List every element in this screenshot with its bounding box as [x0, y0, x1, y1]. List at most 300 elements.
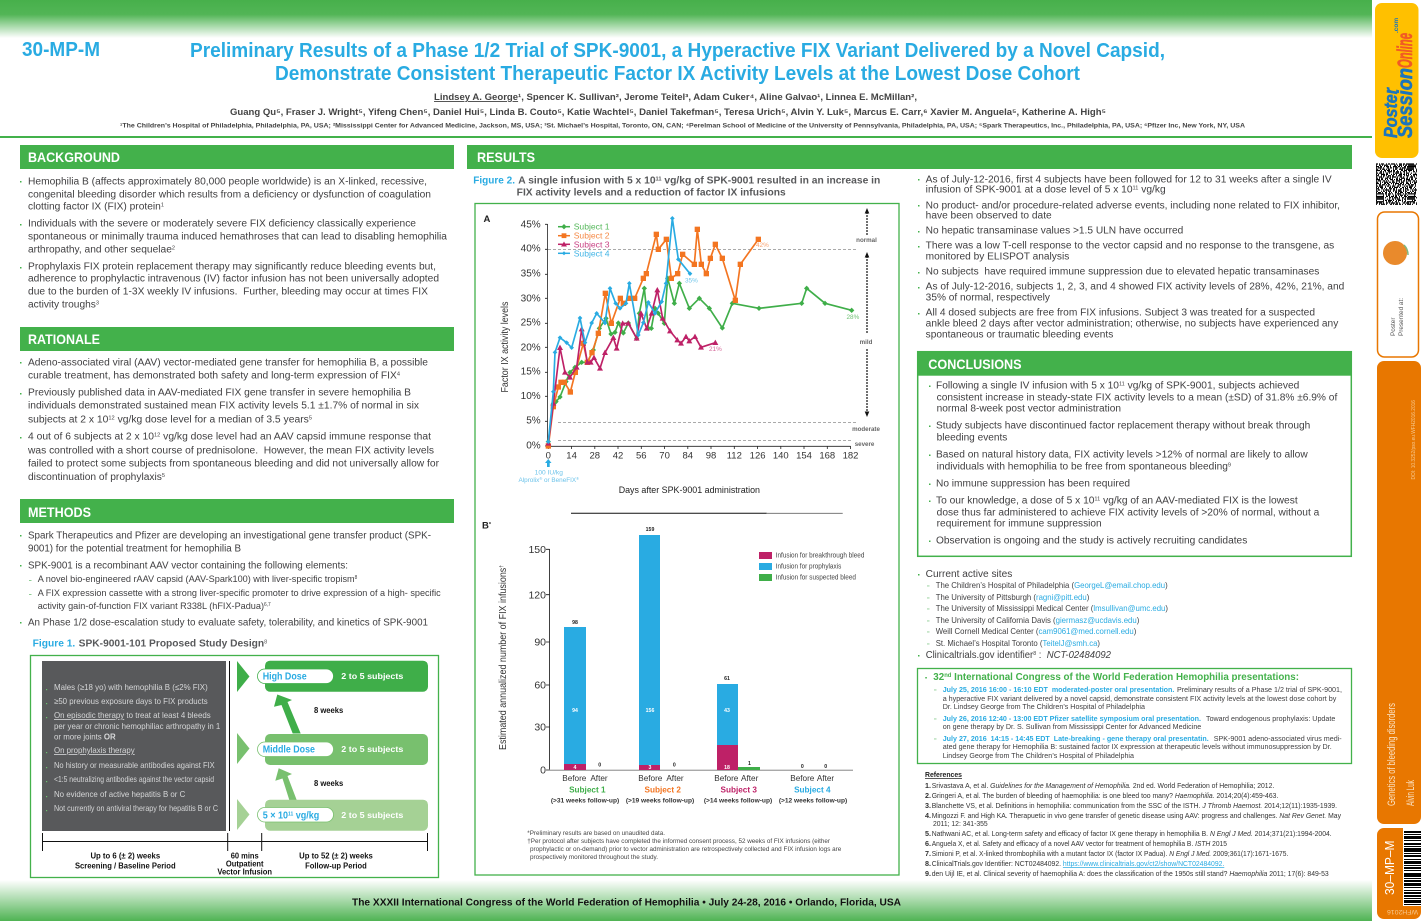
text block: presentation list: SPK-9001 adeno-associated virus medi-	[1214, 734, 1342, 743]
text block: rationale bullets: was controlled with a short course of prednisolone. However, the mean FIX activity levels	[27, 446, 434, 456]
reference list	[925, 781, 1341, 878]
sidebar: orange topic panel: Genetics of bleeding disorders	[1386, 703, 1398, 806]
reference list: 3.	[925, 801, 931, 810]
dose bar: middle dose: Middle Dose	[263, 744, 315, 756]
reference list: Mingozzi F. and High KA. Therapuetic in vivo gene transfer of genetic disease using AAV: progress and challenges. Nat Rev Genet. May	[932, 811, 1341, 820]
text block: conclusions bullets: 11	[1094, 496, 1100, 502]
text block: results bullets: No subjects have required immune suppression due to elevated hepatic transaminases	[926, 266, 1319, 278]
text block: rationale bullets	[20, 358, 440, 483]
text block: background bullets: activity troughs	[28, 300, 95, 310]
subject 1 bars	[564, 620, 601, 771]
text block: conclusions bullets: Observation is ongoing and the study is actively recruiting candidates	[936, 536, 1247, 546]
panel label B: *	[489, 522, 492, 528]
y axis label: Factor IX activity levels	[500, 302, 511, 392]
subject 3 bars: 1	[748, 761, 751, 767]
figure 2 caption: FIX activity levels and a reduction of factor IX infusions	[517, 188, 786, 199]
legend: Infusion for prophylaxis	[776, 562, 842, 570]
text block: results bullets: ankle bleed 2 days after vector administration; otherwise, no subjects have experienced any	[926, 318, 1338, 330]
text block: background bullets: Hemophilia B (affects approximately 80,000 people worldwide) is an X-linked, recessive,	[28, 176, 427, 188]
y axis: 30%	[521, 294, 541, 304]
x axis: 154	[796, 450, 812, 462]
timeline: Up to 52 (± 2) weeks	[299, 852, 373, 860]
text block: current active sites: 8	[1033, 651, 1036, 657]
end value labels: 21%	[709, 346, 722, 353]
arrow: high dose escalation	[274, 694, 301, 734]
footer gradient band	[0, 880, 1372, 921]
figure 2 caption: vg/kg of SPK-9001 resulted in an increase in	[662, 176, 880, 187]
text block: presentation list: on gene therapy by Dr. S. Sullivan from Mississippi Center for Advanced Medicine	[943, 722, 1201, 731]
subject 3 bars	[717, 676, 760, 771]
dose bar: low dose: 11	[288, 812, 293, 818]
y axis: 60	[534, 680, 546, 692]
subject 1 bars: 94	[572, 708, 578, 714]
text block: rationale bullets: 12	[108, 416, 115, 422]
x axis: 84	[683, 450, 693, 462]
text block: presentation list: a hyperactive FIX variant delivered by a novel capsid, demonstrate consistent FIX activity levels at the lowest dose cohort by	[943, 694, 1336, 703]
authors: ¹The Children’s Hospital of Philadelphia, Philadelphia, PA, USA; ²Mississippi Center for Advanced Medicine, Jackson, MS, USA; ³St. Michael’s Hospital, Toronto, ON, CAN; ⁴Perelman School of Medicine of the University of Pennsylvania, Philadelphia, PA, USA; ⁵Spark Therapeutics, Inc., Philadelphia, PA, USA; ⁶Pfizer Inc, New York, NY, USA	[120, 122, 1245, 130]
legend: Subject 1	[574, 222, 610, 232]
subject 3 bars: 18	[724, 765, 730, 771]
dose bar: low dose	[237, 799, 428, 831]
text block: current active sites: Weill Cornell Medical Center (cam9061@med.cornell.edu)	[936, 626, 1136, 636]
legend: Infusion for suspected bleed	[776, 572, 856, 582]
before after labels: Before	[562, 774, 587, 783]
legend: Subject 2	[574, 231, 610, 241]
x axis	[546, 446, 858, 462]
y axis: 45%	[521, 220, 541, 230]
authors	[120, 92, 1245, 130]
follow-up labels: (>31 weeks follow-up)	[551, 798, 619, 804]
text block: methods bullets: A FIX expression cassette with a strong liver-specific promoter to drive expression of a high- specific	[38, 588, 441, 599]
text block: rationale bullets: 5	[162, 473, 165, 479]
subject 4 values: 0	[801, 764, 804, 770]
inclusion criteria panel: Not currently on antiviral therapy for hepatitis B or C	[54, 804, 218, 813]
presented at text: Poster	[1390, 317, 1397, 336]
text block: current active sites: The Children’s Hospital of Philadelphia (GeorgeL@email.chop.edu)	[936, 580, 1168, 590]
text block: results bullets: 35% of normal, respectively	[926, 292, 1050, 304]
heading: rationale	[20, 327, 454, 351]
text block: conclusions bullets: dose thus far administered to achieve FIX activity levels of >20% of normal, without a	[937, 508, 1320, 518]
text block: conclusions bullets: 9	[1228, 462, 1231, 468]
authors: Guang Qu⁵, Fraser J. Wright⁵, Yifeng Chen⁵, Daniel Hui⁵, Linda B. Couto⁵, Katie Wachtel⁵, Daniel Takefman⁵, Teresa Urich⁵, Alvin Y. Luk⁵, Marcus E. Carr,⁶ Xavier M. Anguela⁵, Katherine A. High⁵	[230, 107, 1106, 117]
figure 2 caption	[473, 176, 880, 199]
text block: results bullets: have been observed to date	[926, 210, 1052, 222]
text block: conclusions bullets: To our knowledge, a dose of 5 x 10	[936, 496, 1091, 506]
text block: results bullets: No product- and/or procedure-related adverse events, including none related to FIX inhibitor,	[926, 200, 1340, 212]
reference list: Srivastava A, et al. Guidelines for the Management of Hemophilia. 2nd ed. World Federation of Hemophilia; 2012.	[932, 781, 1274, 790]
inclusion criteria panel: No history or measurable antibodies against FIX	[54, 761, 215, 770]
text block: methods bullets	[20, 530, 441, 628]
heading: rationale: RATIONALE	[28, 331, 100, 347]
reference list: 9.	[925, 869, 931, 878]
footnotes: *Preliminary results are based on unaudited data.	[527, 830, 665, 837]
text block: results bullets: All 4 dosed subjects are free from FIX infusions. Subject 3 was treated for a suspected	[926, 308, 1315, 318]
sidebar: orange topic panel: Alvin Luk	[1405, 780, 1417, 806]
before after labels: After	[817, 774, 834, 783]
x axis: 168	[819, 450, 835, 462]
timeline: Up to 6 (± 2) weeks	[90, 852, 161, 860]
top gradient band	[0, 0, 1372, 38]
inclusion criteria panel: per year or chronic hemophiliac arthropathy in 1	[54, 722, 221, 731]
text block: rationale bullets: 4	[397, 372, 400, 378]
panel: conclusions	[917, 351, 1352, 556]
reference list: 4.	[925, 811, 931, 820]
text block: results bullets: spontaneous or traumatic bleeding events	[926, 330, 1113, 340]
series: subject 3	[548, 290, 715, 443]
sidebar: QR code	[1376, 163, 1417, 205]
legend: Infusion for breakthrough bleed	[776, 550, 864, 560]
sidebar: poster session online logo: Session	[1394, 68, 1417, 138]
inclusion criteria panel: or more joints OR	[54, 732, 116, 742]
text block: current active sites: The University of California Davis (giermasz@ucdavis.edu)	[936, 615, 1139, 625]
timeline: Outpatient	[226, 860, 264, 868]
text block: methods bullets: 8	[355, 575, 358, 581]
follow-up labels	[551, 798, 847, 804]
sidebar: poster session online logo: .com	[1393, 18, 1400, 33]
text block: current active sites: The University of Pittsburgh (ragni@pitt.edu)	[936, 592, 1089, 602]
text block: conclusions bullets: 11	[1119, 382, 1125, 388]
text block: results bullets: As of July-12-2016, first 4 subjects have been followed for 12 to 31 weeks after a single IV	[926, 174, 1332, 186]
reference list: Nathwani AC, et al. Long-term safety and efficacy of factor IX gene therapy in hemophilia B. N Engl J Med. 2014;371(21):1994-2004.	[932, 829, 1332, 838]
text block: presentation list: July 26, 2016 12:40 - 13:00 EDT Pfizer satellite symposium oral presentation.	[943, 714, 1201, 723]
heading: conclusions	[917, 351, 1352, 376]
severity labels: moderate	[852, 426, 880, 433]
y axis: 20%	[521, 342, 541, 354]
reference list: Simioni P, et al. X-linked thrombophilia with a mutant factor IX (factor IX Padua). N Engl J Med. 2009;361(17):1671-1675.	[932, 849, 1288, 858]
inclusion criteria panel	[42, 661, 226, 831]
timeline: Follow-up Period	[305, 862, 367, 870]
text block: conclusions bullets	[929, 380, 1338, 546]
text block: background bullets: 2	[172, 246, 175, 252]
y axis: 0%	[526, 440, 541, 452]
text block: current active sites: NCT-02484092	[1047, 650, 1111, 661]
figure 2 caption: Figure 2.	[473, 176, 515, 187]
icon: conference logo	[1383, 241, 1408, 265]
barcode	[1404, 831, 1421, 905]
text block: presentation list: July 27, 2016 14:15 - 14:45 EDT Late-breaking - gene therapy oral presentatin.	[943, 734, 1209, 743]
panel label A: A	[484, 214, 490, 225]
severity labels: severe	[855, 441, 875, 448]
text block: results bullets: infusion of SPK-9001 at a dose level of 5 x 10	[926, 184, 1128, 196]
legend: Subject 4	[574, 248, 610, 258]
x axis: 182	[843, 450, 858, 462]
text block: rationale bullets: discontinuation of prophylaxis	[28, 472, 159, 483]
figure 1 caption: 8	[264, 640, 267, 646]
subject 1 bars: 0	[598, 762, 601, 768]
legend	[759, 550, 864, 582]
footnotes: †Per protocol after subjects have completed the informed consent process, 52 weeks of FIX infusions (either	[527, 838, 831, 845]
authors: Lindsey A. George ¹, Spencer K. Sullivan², Jerome Teitel³, Adam Cuker⁴, Aline Galvao¹, Linnea E. McMillan²,	[434, 92, 917, 102]
subject 1 bars: 98	[572, 620, 578, 626]
x axis: 112	[727, 450, 742, 462]
subject 2 bars	[639, 527, 676, 771]
text block: conclusions bullets: Study subjects have discontinued factor replacement therapy without break through	[936, 420, 1310, 432]
text block: presentation list: Preliminary results of a Phase 1/2 trial of SPK-9001,	[1177, 685, 1342, 694]
reference list: ClinicalTrials.gov Identifier: NCT02484092. https://www.clinicaltrials.gov/ct2/show/NCT02484092.	[932, 859, 1224, 868]
text block: conclusions bullets: consistent increase in steady-state FIX activity levels to a mean (±SD) of 31.8% ±6.9% of	[937, 392, 1338, 404]
sidebar: presented at panel	[1378, 212, 1418, 357]
text block: methods bullets: Spark Therapeutics and Pfizer are developing an investigational gene transfer product (SPK-	[28, 530, 431, 542]
text block: methods bullets: An Phase 1/2 dose-escalation study to evaluate safety, tolerability, and kinetics of SPK-9001	[28, 618, 428, 628]
text block: current active sites	[918, 569, 1168, 661]
heading: congress presentations: International Congress of the World Federation Hemophilia presentations:	[951, 672, 1299, 683]
data series	[548, 218, 852, 446]
panel label B: B	[482, 520, 489, 532]
y axis: 5%	[526, 416, 541, 426]
series: subject 2	[548, 229, 758, 446]
figure 1 caption: SPK-9001-101 Proposed Study Design	[79, 638, 260, 650]
before after labels: After	[741, 774, 759, 783]
sidebar: poster id and barcode	[1377, 828, 1421, 919]
y axis: 25%	[521, 318, 541, 328]
text block: presentation list: Dr. Lindsey George from The Children’s Hospital of Philadelphia	[943, 702, 1146, 711]
label: 8 weeks lower: 8 weeks	[314, 779, 344, 788]
label: 8 weeks upper: 8 weeks	[314, 706, 344, 715]
text block: background bullets: 1	[161, 202, 164, 208]
panel: rationale	[20, 327, 454, 483]
text block: rationale bullets: vg/kg dose level had an AAV capsid immune response that	[160, 432, 431, 442]
legend: Subject 3	[574, 239, 610, 249]
y axis: 35%	[521, 268, 541, 280]
heading: methods	[20, 499, 454, 523]
text block: presentation list: Toward endogenous prophylaxis: Update	[1206, 714, 1335, 723]
panel: WFH congress presentations	[918, 668, 1352, 764]
y axis: 120	[528, 590, 546, 602]
subject labels: Subject 2	[644, 786, 681, 794]
text block: current active sites: The University of Mississippi Medical Center (lmsullivan@umc.edu)	[936, 603, 1168, 613]
text block: rationale bullets: Adeno-associated viral (AAV) vector-mediated gene transfer for hemophilia B, a possible	[28, 358, 428, 368]
x axis: 126	[750, 450, 766, 462]
title: Demonstrate Consistent Therapeutic Factor IX Activity Levels at the Lowest Dose Cohort	[275, 62, 1080, 85]
header rule	[0, 136, 1372, 138]
presented at text	[1390, 298, 1405, 336]
reference list: 2.	[925, 791, 931, 800]
references	[925, 770, 1341, 878]
before after labels: After	[590, 774, 608, 783]
subject 3 bars: 61	[724, 676, 730, 682]
text block: current active sites: :	[1036, 650, 1047, 661]
timeline: Vector Infusion	[217, 868, 272, 876]
text block: results bullets: There was a low T-cell response to the vector capsid and no response to the transgene, as	[926, 240, 1334, 252]
reference list: 2011; 12: 341-355	[933, 819, 988, 828]
x axis: 0	[546, 450, 551, 462]
figure 2 frame	[475, 204, 899, 875]
subject 4 values	[801, 764, 827, 770]
y axis	[528, 544, 550, 776]
before after labels	[562, 774, 834, 783]
follow-up labels: (>14 weeks follow-up)	[704, 798, 772, 804]
text block: rationale bullets: 12	[154, 432, 160, 438]
before after labels: Before	[790, 774, 815, 783]
y axis: 0	[540, 764, 546, 776]
text block: background bullets: clotting factor IX (FIX) protein	[28, 202, 158, 212]
inclusion criteria panel: On episodic therapy to treat at least 4 bleeds	[54, 711, 211, 720]
y axis: 90	[534, 636, 546, 648]
text block: conclusions bullets: bleeding events	[937, 432, 1007, 444]
text block: methods bullets: activity gain-of-function FIX variant R338L (hFIX-Padua)	[38, 601, 273, 612]
text block: background bullets: 3	[96, 300, 99, 306]
text block: current active sites: Current active sites	[926, 569, 1012, 580]
subject 4 values: 0	[824, 764, 827, 770]
text block: current active sites: Clinicaltrials.gov identifier	[926, 650, 1039, 661]
infusion annotation: or BeneFIX	[542, 477, 577, 484]
infusion annotation: 100 IU/kg	[535, 470, 563, 476]
dose bar: high dose: High Dose	[263, 672, 307, 682]
text block: background bullets: adherence to prophylactic intravenous (IV) factor infusion has not been universally adopted	[28, 274, 439, 284]
text block: conclusions bullets: vg/kg of an AAV-mediated FIX is the lowest	[1100, 496, 1298, 506]
text block: rationale bullets: 5	[309, 416, 312, 422]
subject labels: Subject 3	[720, 786, 757, 794]
x axis: 70	[659, 450, 670, 462]
follow-up labels: (>12 weeks follow-up)	[779, 798, 847, 804]
footer text: The XXXII International Congress of the World Federation of Hemophilia • July 24-28, 2016 • Orlando, Florida, USA	[352, 898, 901, 908]
text block: conclusions bullets: normal 8-week post vector administration	[937, 404, 1121, 414]
heading: background: BACKGROUND	[28, 149, 120, 165]
dose bar: low dose: 5 × 10	[263, 810, 291, 822]
subject labels: Subject 1	[569, 786, 606, 794]
before after labels: Before	[714, 774, 739, 783]
figure 1: study design	[30, 656, 438, 878]
dose bar: high dose	[237, 661, 428, 692]
end value labels	[685, 242, 860, 353]
presented at text: Presented at:	[1398, 298, 1405, 336]
reference list: den Uijl IE, et al. Clinical severity of haemophilia A: does the classification of the 1950s still stand? Haemophilia 2011; 17(6): 849-53	[932, 869, 1329, 878]
dose bar: middle dose	[237, 733, 428, 765]
arrow: middle dose escalation	[275, 768, 297, 800]
arrowheads	[865, 208, 869, 417]
x axis title: Days after SPK-9001 administration	[619, 485, 760, 496]
heading: background	[20, 145, 454, 169]
text block: background bullets: due to the burden of 1-3X weekly IV infusions. Further, bleeding may occur at times FIX	[28, 286, 428, 298]
text block: rationale bullets: vg/kg dose level for a median of 3.5 years	[115, 414, 309, 426]
y axis: 150	[528, 544, 546, 556]
infusion annotation: ®	[576, 476, 579, 481]
subject labels	[569, 786, 831, 794]
severity labels: normal	[856, 237, 877, 244]
footnotes: prophylactic or on-demand) prior to vector administration are retrospectively collected and FIX infusion logs are	[530, 846, 842, 853]
text block: conclusions bullets: individuals with hemophilia to be free from spontaneous bleeding	[937, 462, 1224, 472]
infusion annotation	[518, 459, 579, 484]
panel: methods	[20, 499, 454, 878]
references heading: References	[925, 770, 962, 779]
text block: presentation list	[934, 685, 1342, 760]
legend	[558, 222, 610, 258]
sidebar: poster session online logo: Poster	[1381, 87, 1401, 138]
figure 1 caption: Figure 1.	[33, 638, 76, 650]
text block: results bullets: monitored by ELISPOT analysis	[926, 252, 1069, 262]
x axis: 42	[613, 450, 623, 462]
severity arrows	[866, 212, 868, 412]
y axis: 10%	[521, 391, 541, 402]
text block: background bullets: arthropathy, and other sequelae	[28, 244, 169, 256]
text block: rationale bullets: individuals demonstrated sustained mean FIX activity levels 5.1 ±1.7% of normal in six	[28, 400, 419, 412]
x axis: 56	[636, 450, 647, 462]
subject 2 bars: 3	[649, 765, 652, 771]
text block: methods bullets: SPK-9001 is a recombinant AAV vector containing the following elements:	[28, 560, 348, 572]
subject 2 bars: 0	[673, 762, 676, 768]
text block: conclusions bullets: vg/kg of SPK-9001, subjects achieved	[1125, 380, 1299, 392]
text block: background bullets: Individuals with the severe or moderately severe FIX deficiency classically experience	[28, 218, 416, 230]
baseline	[549, 770, 853, 771]
text block: presentation list: July 25, 2016 16:00 - 16:10 EDT moderated-poster oral presentation.	[943, 685, 1174, 694]
text block: results bullets	[918, 174, 1344, 340]
panel: background	[20, 145, 454, 310]
dose bar: low dose: 2 to 5 subjects	[341, 810, 404, 820]
infusion annotation: ®	[539, 476, 542, 481]
sidebar: poster session online logo	[1375, 3, 1418, 158]
heading: results: RESULTS	[477, 149, 535, 165]
sidebar: orange topic panel	[1377, 361, 1421, 824]
inclusion criteria panel: No evidence of active hepatitis B or C	[54, 790, 185, 799]
y axis: 30	[534, 722, 546, 734]
text block: conclusions bullets: Following a single IV infusion with 5 x 10	[936, 380, 1116, 392]
text block: rationale bullets: curable treatment, has demonstrated both safety and long-term expression of FIX	[28, 370, 388, 382]
reference list: 5.	[925, 829, 931, 838]
dose bar: middle dose: 2 to 5 subjects	[341, 744, 404, 754]
text block: background bullets: Prophylaxis FIX protein replacement therapy may significantly reduce bleeding events but,	[28, 262, 436, 272]
text block: results bullets: As of July-12-2016, subjects 1, 2, 3, and 4 showed FIX activity levels of 28%, 42%, 21%, and	[926, 282, 1344, 292]
heading: results	[467, 145, 1352, 169]
reference dashed lines	[548, 249, 858, 440]
subject 2 bars: 156	[646, 708, 654, 714]
heading: conclusions: CONCLUSIONS	[928, 356, 1022, 372]
figure 2 caption: 11	[656, 177, 662, 183]
reference list: Gringeri A, et al. The burden of bleeding of haemophilia: is one bleed too many? Haemophilia. 2014;20(4):459-463.	[932, 791, 1278, 800]
text block: rationale bullets: Previously published data in AAV-mediated FIX gene transfer in severe hemophilia B	[28, 388, 411, 398]
dose bar: high dose: 2 to 5 subjects	[341, 671, 404, 681]
text block: conclusions bullets: requirement for immune suppression	[937, 518, 1102, 530]
text block: background bullets	[20, 176, 447, 310]
reference list: Blanchette VS, et al. Definitions in hemophilia: communication from the SSC of the ISTH. J Thromb Haemost. 2014;12(11):1935-1939.	[932, 801, 1337, 810]
heading: congress presentations: 32	[933, 672, 944, 683]
end value labels: 28%	[846, 314, 860, 321]
poster number: 30-MP-M	[22, 39, 100, 61]
x axis: 98	[706, 450, 716, 462]
text block: background bullets: congenital bleeding disorder which results from a deficiency or dysfunction of coagulation	[28, 190, 431, 200]
text block: conclusions bullets: No immune suppression has been required	[936, 478, 1130, 490]
y axis: 15%	[521, 366, 541, 378]
end value labels: 42%	[756, 242, 769, 249]
subject labels: Subject 4	[794, 786, 831, 794]
timeline: 60 mins	[231, 852, 259, 860]
footnotes: prospectively monitored throughout the study.	[530, 854, 658, 861]
reference list: 8.	[925, 859, 931, 868]
severity labels: mild	[860, 339, 873, 346]
chart B: annualized FIX infusions	[482, 520, 864, 861]
timeline: Screening / Baseline Period	[75, 862, 176, 870]
subject 2 bars: 159	[646, 527, 654, 533]
before after labels: After	[666, 774, 684, 783]
series: subject 1	[548, 278, 852, 442]
x axis: 28	[590, 450, 600, 462]
reference list: 1.	[925, 781, 931, 790]
title	[190, 39, 1165, 85]
title: Preliminary Results of a Phase 1/2 Trial of SPK-9001, a Hyperactive FIX Variant Delivered by a Novel Capsid,	[190, 39, 1165, 62]
infusion annotation: Alprolix	[518, 477, 540, 484]
text block: conclusions bullets: Based on natural history data, FIX activity levels >12% of normal are likely to allow	[936, 450, 1308, 460]
chart A: FIX activity over time	[484, 208, 880, 496]
x axis: 14	[566, 450, 577, 462]
text block: rationale bullets: failed to protect some subjects from spontaneous bleeding and did not universally allow for	[28, 458, 440, 470]
text block: methods bullets: 9001) for the potential treatment for hemophilia B	[28, 544, 241, 554]
subject 3 bars: 43	[724, 708, 730, 714]
inclusion criteria panel: On prophylaxis therapy	[54, 746, 136, 755]
footnotes	[527, 830, 842, 861]
text block: results bullets: 11	[1133, 186, 1138, 192]
sidebar: orange topic panel: DOI: 10.3252/pso.eu.WFH2016.2016	[1411, 400, 1417, 480]
end value labels: 35%	[685, 278, 698, 284]
reference list: Anguela X, et al. Safety and efficacy of a novel AAV vector for treatment of hemophilia B. ISTH 2015	[932, 839, 1227, 848]
